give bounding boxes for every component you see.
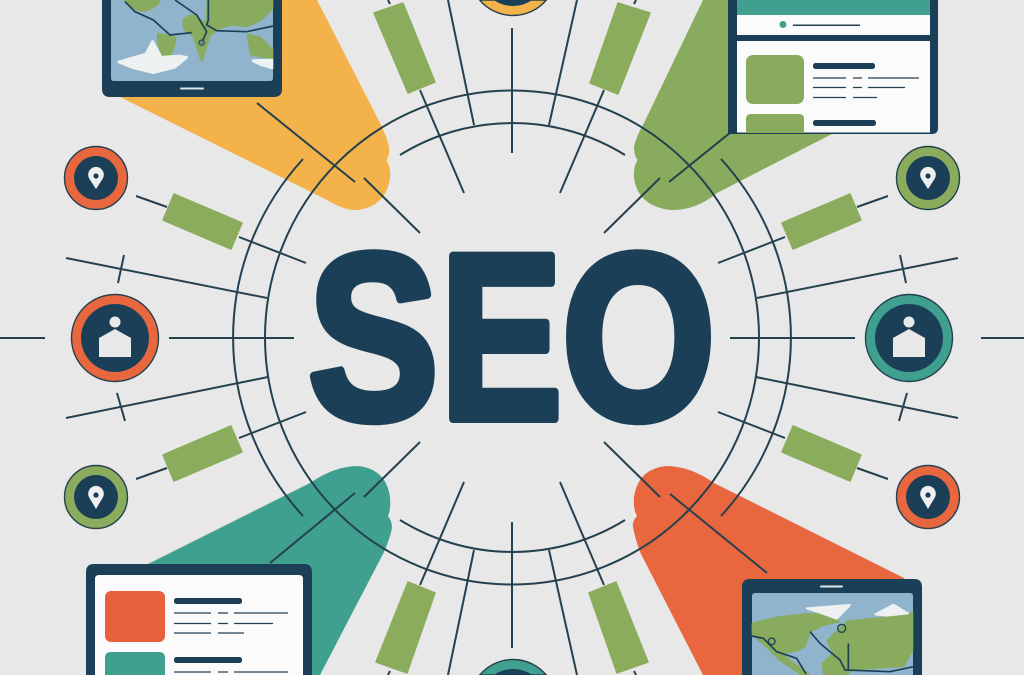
cone: green top right <box>634 0 904 210</box>
icon: badge top <box>480 0 546 16</box>
list item 1 <box>746 55 919 104</box>
cone: teal bottom left <box>110 466 392 675</box>
search row <box>780 21 860 28</box>
list item 1 <box>105 591 288 642</box>
cone: orange bottom right <box>633 466 904 675</box>
icon: house badge right <box>866 294 952 382</box>
icon: pin green lower left <box>64 466 128 528</box>
list item 2 <box>746 114 876 133</box>
title: SEO <box>308 205 716 469</box>
title: SEO: E <box>440 205 562 469</box>
icon: house badge left <box>72 294 158 382</box>
header band <box>737 0 930 15</box>
cone: yellow top left <box>110 0 390 210</box>
title: SEO: S <box>308 205 439 469</box>
tablet: map top left <box>102 0 282 97</box>
list item 2 <box>105 652 288 675</box>
green bars <box>163 3 861 673</box>
tablet: listing top right <box>728 0 938 134</box>
tablet: listing bottom left <box>86 564 312 675</box>
icon: pin orange upper left <box>64 146 128 210</box>
icon: badge bottom <box>480 659 546 675</box>
icon: pin orange lower right <box>896 466 960 528</box>
tablet: map bottom right <box>742 579 922 675</box>
icon: pin green upper right <box>896 146 960 210</box>
title: SEO: O <box>562 206 716 469</box>
